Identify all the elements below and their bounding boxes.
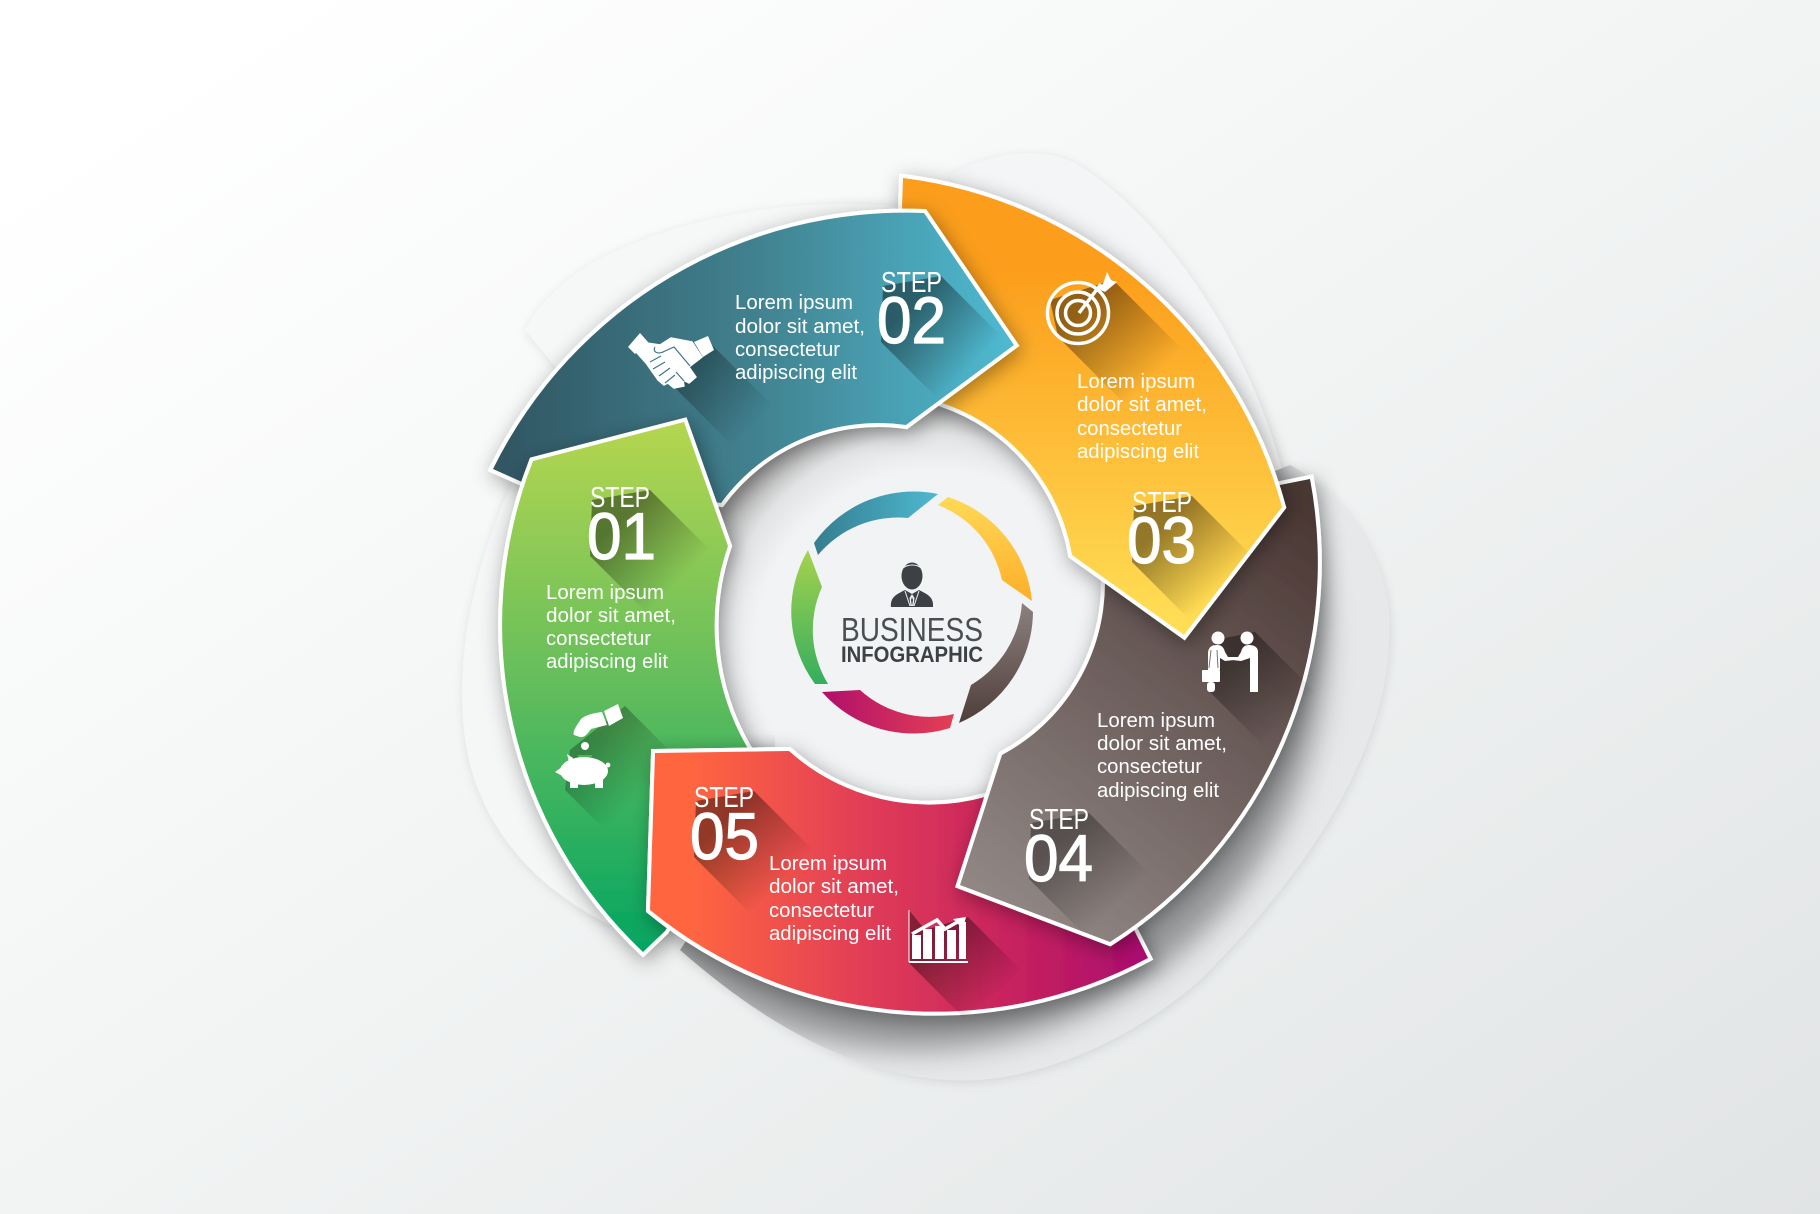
text block: dolor sit amet, xyxy=(1097,733,1227,755)
long shadow: icon xyxy=(640,345,772,448)
text block: consectetur xyxy=(1097,756,1202,778)
text block: adipiscing elit xyxy=(769,923,891,945)
text block: consectetur xyxy=(769,900,874,922)
inner arrow: teal xyxy=(814,492,938,555)
long shadow: number xyxy=(694,791,814,917)
panel: step 04 xyxy=(960,479,1318,942)
step label: STEP xyxy=(881,267,942,299)
panel: step 05 band (base) xyxy=(650,751,1148,1012)
centre title: BUSINESS xyxy=(841,611,983,648)
text block: adipiscing elit xyxy=(735,362,857,384)
icon: bar chart with arrow xyxy=(908,910,968,963)
step label: STEP xyxy=(694,782,754,814)
band head overlapping step 01 tail xyxy=(646,747,840,1006)
step label: 01 xyxy=(587,499,656,573)
text block: Lorem ipsum xyxy=(735,292,853,314)
background swoosh: lower right blob xyxy=(680,465,1389,1080)
icon: two businessmen shaking hands xyxy=(1202,632,1258,692)
text block: dolor sit amet, xyxy=(735,316,865,338)
icon: target with arrow xyxy=(1048,272,1117,344)
text block: dolor sit amet, xyxy=(546,605,676,627)
text block: consectetur xyxy=(546,628,651,650)
text block xyxy=(735,292,865,384)
background swoosh: top left xyxy=(525,204,906,420)
text block: Lorem ipsum xyxy=(546,582,664,604)
long shadow: number xyxy=(590,490,710,616)
band xyxy=(502,422,760,952)
text block: consectetur xyxy=(1077,418,1182,440)
panel: step 02 xyxy=(493,213,1014,503)
long shadow: number xyxy=(881,276,1001,402)
text block: adipiscing elit xyxy=(1097,780,1219,802)
band head shadow on step 01 tail xyxy=(638,740,775,940)
inner arrow: green xyxy=(791,550,828,684)
long shadow: number xyxy=(1029,813,1149,939)
text block xyxy=(546,582,676,673)
band xyxy=(960,479,1318,942)
inner arrow: red xyxy=(822,690,954,734)
band xyxy=(493,213,1014,503)
text block: Lorem ipsum xyxy=(1077,371,1195,393)
text block: dolor sit amet, xyxy=(769,876,899,898)
long shadow: icon xyxy=(565,706,675,840)
text block: Lorem ipsum xyxy=(1097,710,1215,732)
text block xyxy=(1097,710,1227,802)
inner arrow: brown xyxy=(959,603,1033,723)
inner arrow: yellow xyxy=(938,497,1032,601)
text block: dolor sit amet, xyxy=(1077,394,1207,416)
inner ring: five small arrows xyxy=(791,492,1033,734)
text block: Lorem ipsum xyxy=(769,853,887,875)
long shadow: icon xyxy=(1210,632,1315,752)
band xyxy=(902,178,1282,635)
text block xyxy=(769,853,899,945)
soft shadow under the ring xyxy=(680,465,1342,1067)
step label: STEP xyxy=(1029,804,1089,836)
panel: step 03 xyxy=(902,178,1282,635)
step label: 05 xyxy=(690,799,759,873)
icon: hand dropping coin into piggy bank xyxy=(555,704,623,788)
text block: adipiscing elit xyxy=(546,651,668,673)
long shadow: icon xyxy=(909,910,1023,1018)
step label: 02 xyxy=(877,283,946,357)
centre title xyxy=(841,611,983,667)
panel: step 01 xyxy=(502,422,760,952)
text block: adipiscing elit xyxy=(1077,441,1199,463)
centre title: INFOGRAPHIC xyxy=(841,642,983,667)
long shadow: icon xyxy=(1050,280,1183,407)
background swoosh: left xyxy=(462,455,660,925)
text block: consectetur xyxy=(735,339,840,361)
step label: 04 xyxy=(1024,821,1093,895)
icon: handshake xyxy=(628,333,714,388)
step label: STEP xyxy=(1132,487,1192,519)
long shadow: number xyxy=(1132,496,1252,622)
centre icon: businessman xyxy=(891,562,933,607)
text block xyxy=(1077,371,1207,463)
centre disc xyxy=(690,393,1134,837)
step label: 03 xyxy=(1127,503,1196,577)
panel: step 05 xyxy=(638,740,1016,1015)
background swoosh: top right xyxy=(950,153,1285,520)
step label: STEP xyxy=(590,482,650,514)
